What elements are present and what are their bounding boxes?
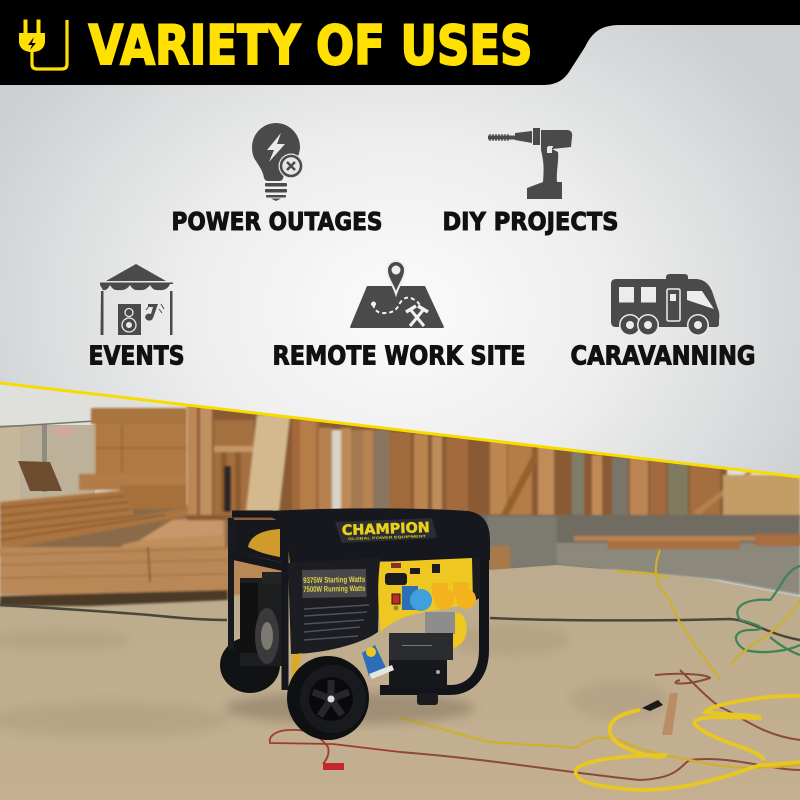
concrete foundation bbox=[478, 514, 800, 596]
yellow diagonal line bbox=[0, 383, 800, 477]
construction site photo bbox=[0, 380, 800, 800]
label: POWER OUTAGES bbox=[172, 207, 382, 236]
wooden stake bbox=[662, 693, 678, 735]
icon: motorhome bbox=[611, 274, 719, 336]
vents bbox=[304, 605, 369, 640]
ground patches bbox=[0, 624, 670, 738]
stacked timber bbox=[0, 406, 276, 556]
brand logo: CHAMPION bbox=[342, 520, 430, 539]
use: remote work site bbox=[272, 261, 526, 372]
wattage sticker: 7500W Running Watts bbox=[303, 584, 366, 594]
wattage sticker: 9375W Starting Watts bbox=[303, 575, 366, 585]
thin yellow cables bbox=[400, 550, 800, 768]
side panel bbox=[288, 558, 380, 654]
house framing bbox=[186, 406, 800, 521]
blue socket bbox=[402, 586, 432, 611]
yellow control panel bbox=[378, 558, 473, 633]
rear wheel bbox=[220, 637, 280, 693]
use: power outages bbox=[172, 123, 382, 236]
panel controls bbox=[385, 563, 440, 610]
icon: map with pin and hammers bbox=[350, 261, 444, 328]
use: events bbox=[88, 264, 184, 372]
left opening interior bbox=[233, 520, 284, 563]
icon: tent with speaker bbox=[100, 264, 173, 335]
right side of housing bbox=[472, 558, 480, 602]
black plug on cord bbox=[642, 700, 663, 711]
wattage sticker bbox=[302, 569, 366, 598]
blue tag bbox=[362, 645, 394, 679]
sky bbox=[0, 384, 763, 474]
green cable bbox=[736, 566, 800, 655]
label: REMOTE WORK SITE bbox=[272, 342, 526, 372]
alternator bbox=[425, 612, 467, 648]
ground bbox=[0, 565, 800, 800]
engine bbox=[240, 572, 282, 666]
use: diy projects bbox=[442, 128, 618, 236]
yellow strut bbox=[291, 653, 302, 685]
icon: light bulb with x bbox=[252, 123, 304, 201]
rear tube frame bbox=[380, 540, 484, 690]
red plug bbox=[323, 763, 344, 770]
fence bbox=[0, 421, 95, 510]
use: caravanning bbox=[570, 274, 756, 372]
brand logo: GLOBAL POWER EQUIPMENT bbox=[348, 534, 427, 541]
left tube frame bbox=[228, 518, 234, 650]
label: CARAVANNING bbox=[570, 342, 756, 372]
fuel tank bbox=[248, 529, 280, 557]
foreground timber bbox=[0, 534, 800, 606]
red and brown cables bbox=[400, 670, 800, 780]
icon: plug bbox=[19, 20, 67, 69]
foot bbox=[417, 693, 438, 705]
title: VARIETY OF USES bbox=[88, 14, 532, 77]
header banner bbox=[0, 0, 800, 85]
yellow sockets bbox=[432, 582, 476, 610]
red cord bbox=[270, 730, 400, 764]
battery box bbox=[389, 633, 453, 688]
icon: drill bbox=[488, 128, 572, 199]
upper housing bbox=[270, 508, 490, 563]
front wheel bbox=[287, 656, 369, 740]
label: EVENTS bbox=[88, 342, 184, 372]
dark hose bbox=[0, 605, 800, 640]
thick yellow cable bbox=[576, 696, 800, 790]
label: DIY PROJECTS bbox=[442, 207, 618, 236]
generator bbox=[220, 508, 490, 740]
generator shadow bbox=[225, 692, 475, 724]
brand plate bbox=[335, 518, 437, 543]
